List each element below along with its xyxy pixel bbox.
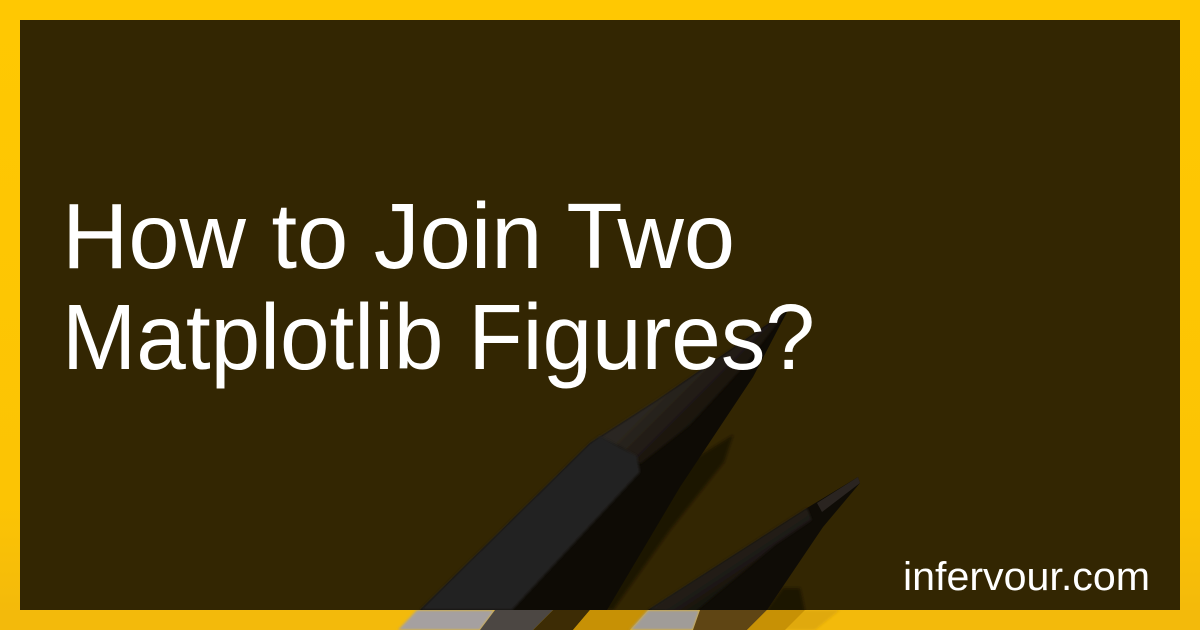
pencil sharpened cone [598,312,786,464]
small pencil lead tip [817,477,860,512]
title: How to Join Two [62,184,735,288]
small pencil silhouette [648,477,860,610]
title: Matplotlib Figures? [62,285,815,389]
title [62,184,815,389]
large pencil illustration [420,310,788,610]
pencil silhouette [420,310,788,610]
site name: infervour.com [903,555,1150,599]
pencil painted body [420,436,640,610]
bottom edge photo band [397,610,838,630]
small pencil shadow [765,588,805,612]
small pencil illustration [648,477,860,612]
small pencil upper side [648,508,812,612]
pencil shadow [608,435,734,610]
